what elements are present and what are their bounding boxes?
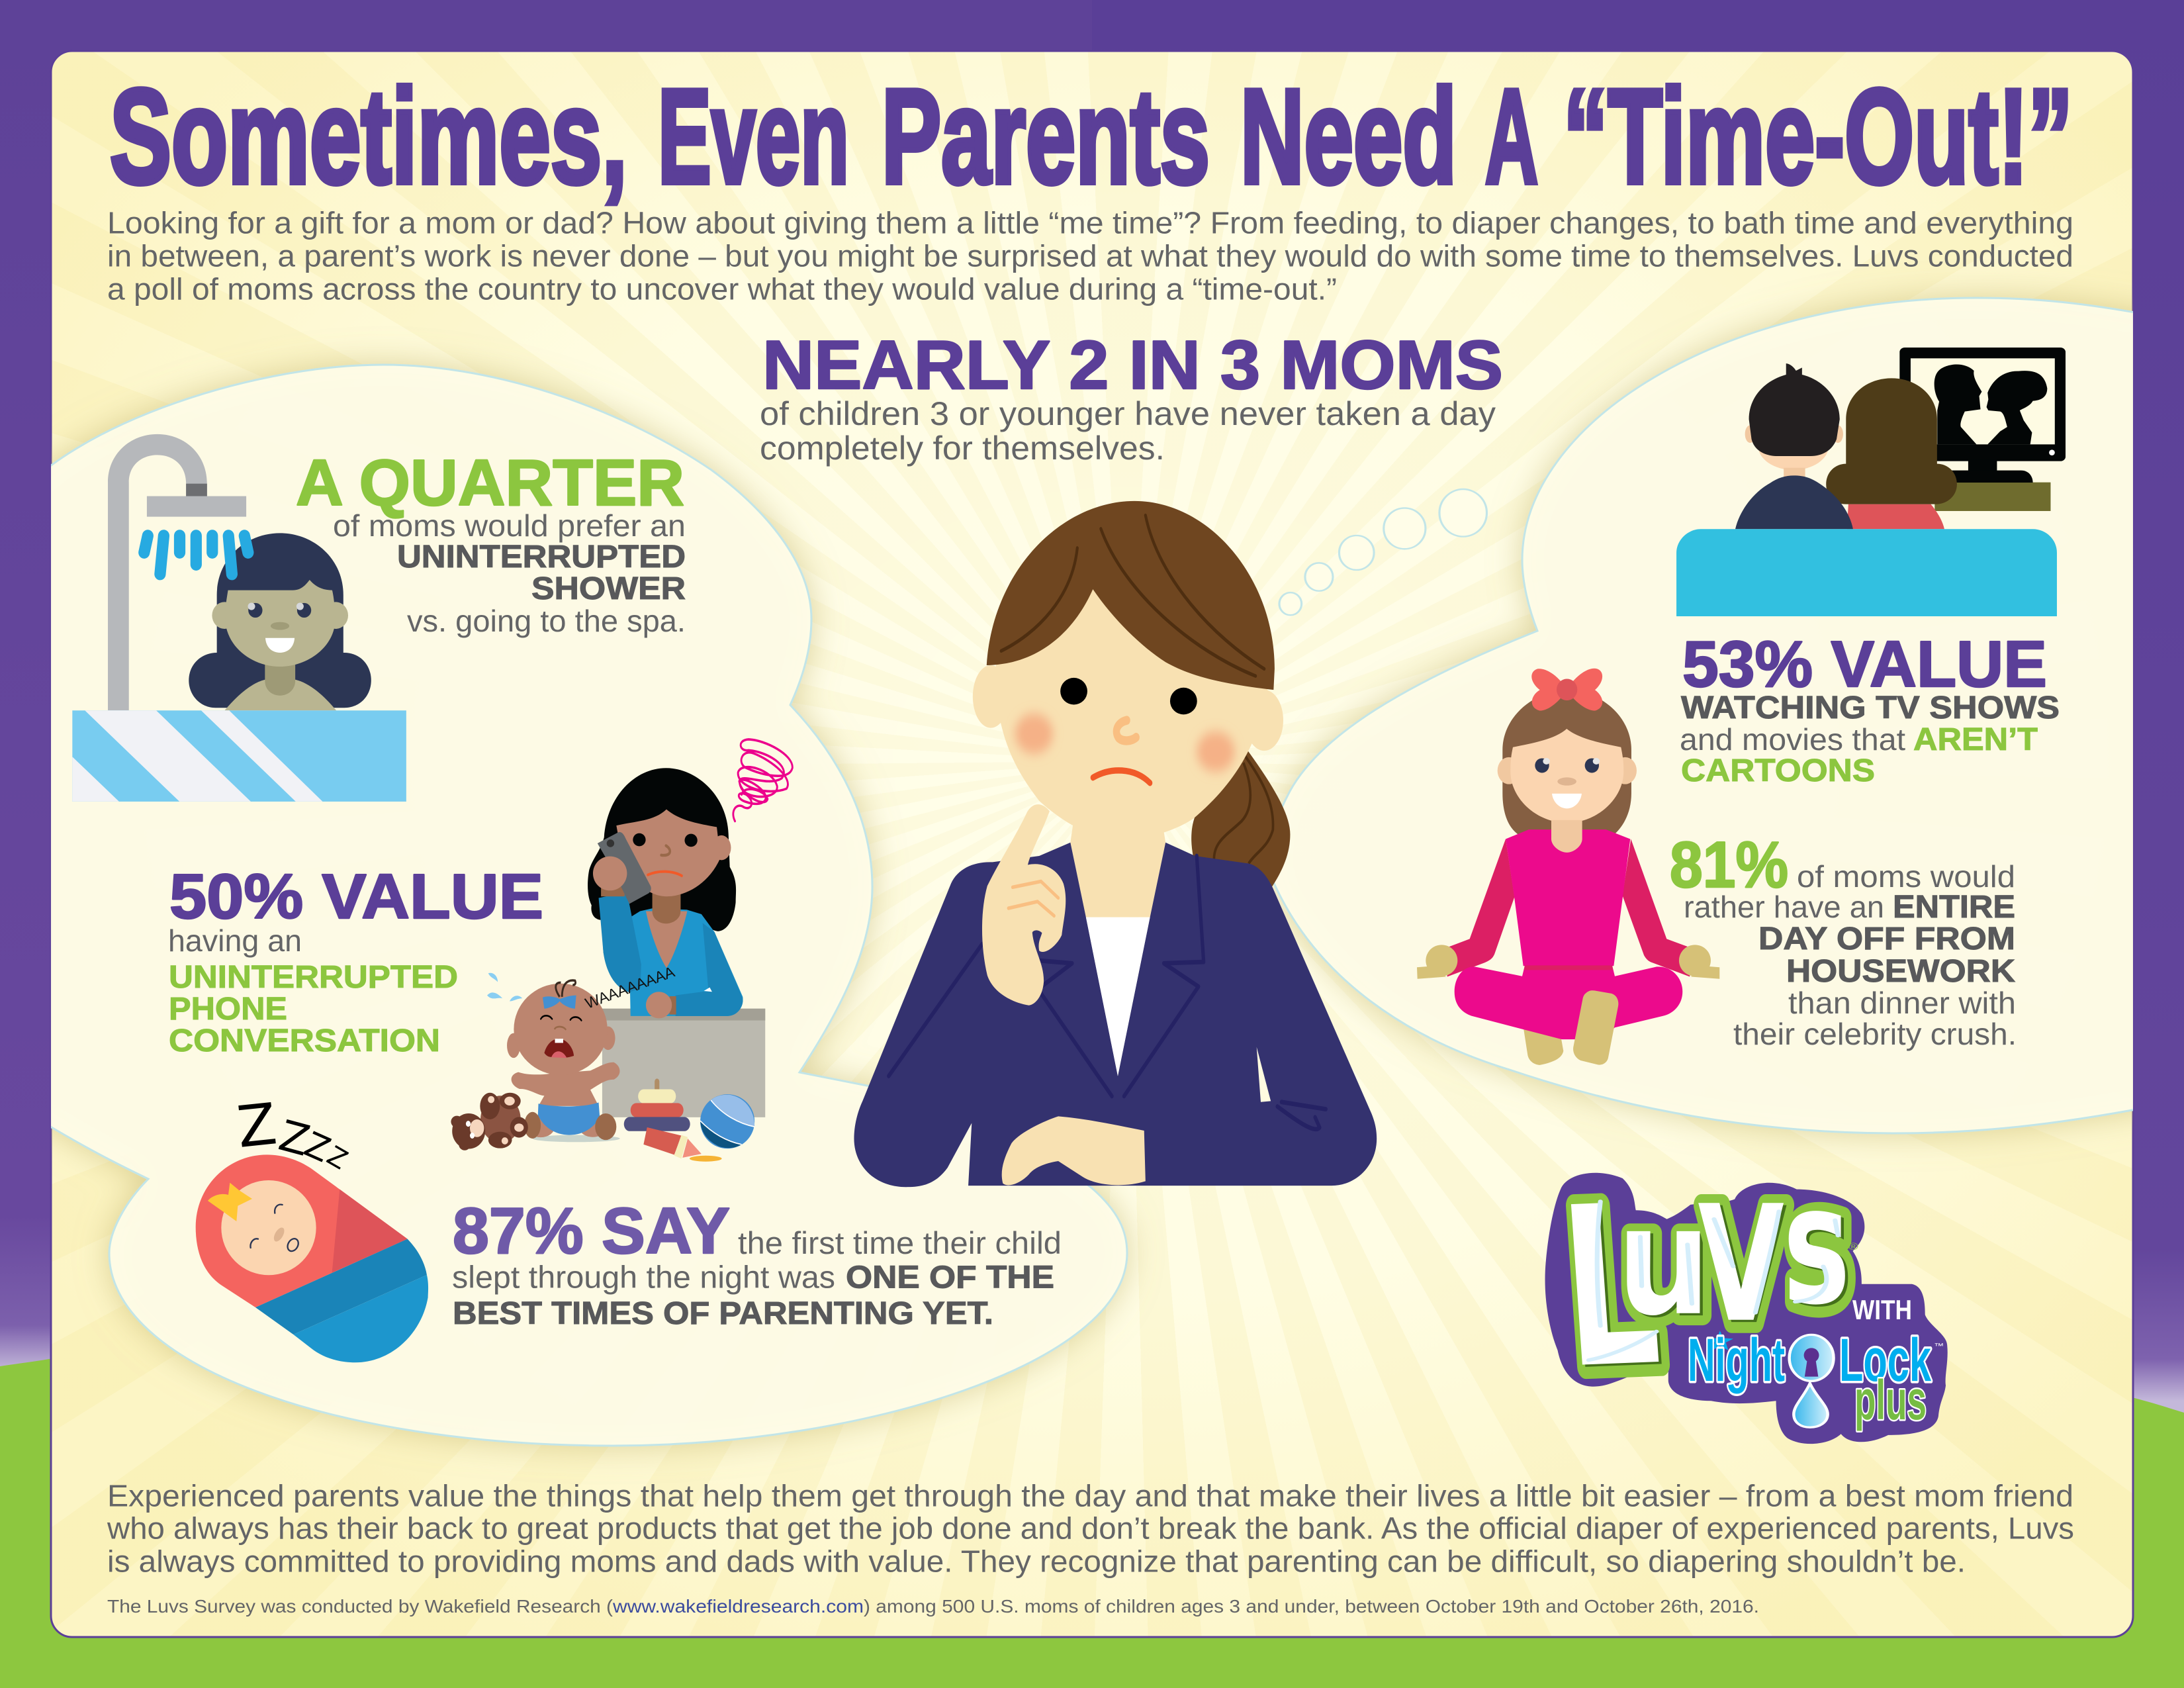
bubble: left: [7, 365, 1127, 1446]
logo lettering: L: [1555, 1157, 1666, 1417]
text block: 81%: ENTIRE: [1893, 890, 2015, 925]
counter: [602, 1009, 765, 1117]
text block: 81%: HOUSEWORK: [1786, 954, 2015, 989]
resting hand: [1002, 1116, 1146, 1185]
logo lettering: s: [1786, 1154, 1853, 1344]
head: [973, 501, 1283, 839]
text block: 81%: their celebrity crush.: [1733, 1017, 2017, 1051]
text block: a quarter: UNINTERRUPTED: [397, 539, 686, 575]
sleep letters: Z: [322, 1141, 353, 1176]
title: A: [1485, 62, 1538, 212]
baby bottle: [643, 1127, 722, 1162]
text block: 53% value: [1680, 628, 2060, 788]
illustration: mom on phone with crying baby: [451, 739, 792, 1162]
logo word: night: Night: [1688, 1327, 1785, 1394]
speech bubbles: [7, 298, 2177, 1446]
text block: 81%: of moms would: [1797, 859, 2015, 894]
headline: nearly 2 in 3 moms: NEARLY 2 IN 3 MOMS: [762, 327, 1503, 404]
text block: 53% value: CARTOONS: [1681, 753, 1875, 788]
text block: 81%: rather have an: [1684, 890, 1884, 924]
text block: 87% say: 87% SAY: [453, 1194, 730, 1267]
sleep letters: Z: [298, 1125, 336, 1170]
hand at chin: [982, 804, 1066, 1006]
logo lettering: s: [1783, 1152, 1850, 1341]
intro paragraph: a poll of moms across the country to uncover what they would value during a “time-out.”: [107, 271, 1337, 306]
text block: a quarter: of moms would prefer an: [333, 508, 686, 543]
logo: Luvs with NightLock plus: [1545, 1152, 1948, 1444]
text block: 50% value: 50% VALUE: [169, 861, 543, 932]
stacking toy: [624, 1078, 690, 1131]
blazer: [854, 843, 1377, 1187]
text block: a quarter: SHOWER: [531, 571, 686, 606]
text block: 87% say: BEST TIMES OF PARENTING YET.: [453, 1296, 993, 1331]
logo: Luvs with NightLock plus: ™: [1934, 1342, 1944, 1350]
icon: girl meditating: [1417, 669, 1719, 1065]
title: [110, 62, 2073, 212]
icon: couple watching tv on sofa: [1676, 348, 2066, 616]
logo backing shape: [1545, 1173, 1948, 1444]
logo word: with: WITH: [1852, 1294, 1912, 1325]
text block: 50% value: PHONE: [169, 992, 287, 1027]
sofa: [1676, 529, 2057, 616]
neck: [1070, 821, 1165, 917]
footnote: The Luvs Survey was conducted by Wakefield Research (: [107, 1596, 614, 1617]
mom: [588, 768, 743, 1018]
text block: 50% value: UNINTERRUPTED: [169, 960, 458, 995]
sleep letters: Z: [274, 1111, 314, 1166]
logo lettering: u: [1619, 1177, 1714, 1351]
thought bubbles: [1279, 489, 1486, 615]
closing paragraph: [107, 1479, 2074, 1578]
bubble: right: [1271, 298, 2177, 1133]
text block: 53% value: WATCHING TV SHOWS: [1681, 690, 2060, 726]
tv set: [1899, 348, 2066, 483]
text block: 87% say: slept through the night was: [452, 1259, 835, 1295]
logo: Luvs with NightLock plus: ®: [1848, 1241, 1858, 1252]
woman viewer: [1826, 378, 1957, 529]
text block: 53% value: AREN’T: [1913, 722, 2038, 757]
footnote: [107, 1596, 1759, 1617]
stress scribble: [733, 739, 792, 821]
logo word: lock: Lock: [1839, 1327, 1932, 1394]
text block: 50% value: having an: [168, 923, 302, 958]
text block: a quarter: vs. going to the spa.: [407, 604, 686, 638]
text block: 81%: DAY OFF FROM: [1758, 921, 2015, 957]
text block: a quarter: [296, 446, 686, 638]
logo lettering: V: [1701, 1174, 1787, 1360]
closing paragraph: who always has their back to great products that get the job done and don’t break the bank. As the official diaper of experienced parents, Luvs: [107, 1511, 2074, 1545]
baby cry text: WAAAAAAAA: [583, 962, 677, 1012]
logo lettering: L: [1557, 1160, 1669, 1419]
logo lettering: [1555, 1152, 1853, 1419]
footnote: ) among 500 U.S. moms of children ages 3 and under, between October 19th and October 26th, 2016.: [864, 1596, 1759, 1617]
crying baby: [487, 973, 620, 1142]
intro paragraph: Looking for a gift for a mom or dad? How about giving them a little “me time”? From feeding, to diaper changes, to bath time and everything: [107, 205, 2073, 240]
closing paragraph: Experienced parents value the things that help them get through the day and that make their lives a little bit easier – from a best mom friend: [107, 1479, 2073, 1513]
text block: 87% say: [452, 1194, 1062, 1331]
text block: 50% value: [168, 861, 543, 1058]
sleep letters: Z: [234, 1091, 280, 1161]
text block: 53% value: 53% VALUE: [1682, 628, 2047, 700]
footnote: www.wakefieldresearch.com: [612, 1596, 864, 1617]
logo lettering: u: [1617, 1175, 1711, 1349]
headline: nearly 2 in 3 moms: of children 3 or younger have never taken a day: [760, 395, 1496, 432]
text block: 87% say: ONE OF THE: [846, 1260, 1054, 1295]
illustration: thinking woman in blazer: [854, 501, 1377, 1187]
title: Sometimes,: [110, 62, 627, 212]
icon: swaddled sleeping baby: [196, 1154, 428, 1362]
intro paragraph: [107, 205, 2073, 306]
text block: 50% value: CONVERSATION: [169, 1023, 440, 1058]
man viewer: [1735, 363, 1853, 529]
logo word: plus: plus: [1854, 1369, 1927, 1431]
text block: 53% value: and movies that: [1680, 722, 1905, 757]
text block: 81%: [1670, 828, 2017, 1051]
logo lettering: V: [1698, 1172, 1784, 1358]
headline: nearly 2 in 3 moms: completely for themselves.: [760, 430, 1165, 467]
intro paragraph: in between, a parent’s work is never done – but you might be surprised at what they would do with some time to themselves. Luvs conducted: [107, 238, 2073, 273]
text block: 81%: 81%: [1670, 828, 1788, 901]
title: Need: [1240, 62, 1457, 212]
ponytail: [1191, 749, 1290, 888]
icon: woman in shower: [72, 434, 406, 802]
text block: 81%: than dinner with: [1788, 986, 2016, 1020]
title: Even: [658, 62, 849, 212]
teddy bear: [451, 1093, 528, 1150]
closing paragraph: is always committed to providing moms and dads with value. They recognize that parenting can be difficult, so diapering shouldn’t be.: [107, 1544, 1966, 1578]
text block: a quarter: A QUARTER: [296, 446, 684, 519]
ball: [700, 1094, 754, 1149]
headline: nearly 2 in 3 moms: [760, 327, 1503, 467]
sleep letters: [234, 1091, 353, 1176]
text block: 87% say: the first time their child: [738, 1225, 1062, 1260]
title: Parents: [882, 62, 1210, 212]
